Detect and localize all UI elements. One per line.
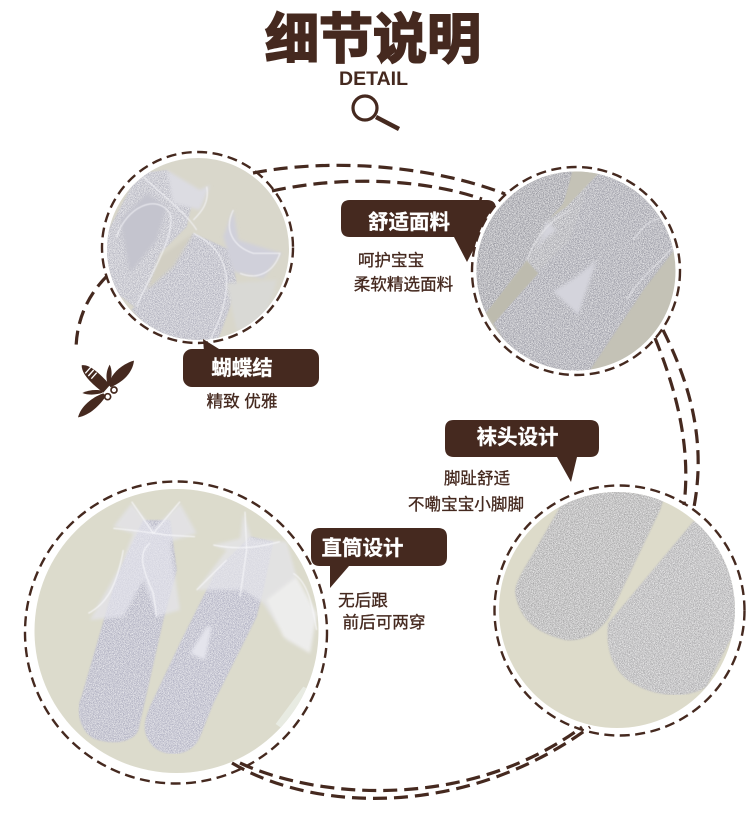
text: 不嘞宝宝小脚脚: 不嘞宝宝小脚脚: [408, 495, 524, 514]
text: 精致 优雅: 精致 优雅: [206, 392, 278, 411]
dashed ring: [494, 486, 744, 736]
label: 直筒设计: 直筒设计: [322, 537, 404, 560]
title: 细节说明: [265, 10, 481, 70]
connector: right double dashed arc: [655, 330, 698, 512]
label: 袜头设计: 袜头设计: [476, 426, 558, 449]
panel: full socks photo: [25, 480, 327, 784]
text: 脚趾舒适: 脚趾舒适: [444, 469, 510, 488]
label: 舒适面料: [341, 200, 496, 262]
label: 舒适面料: 舒适面料: [368, 210, 450, 234]
icon: dragonfly: [78, 361, 134, 417]
dashed ring: [25, 482, 327, 784]
connector: bottom double dashed arc: [232, 727, 590, 798]
connector: top double dashed arc: [253, 165, 505, 199]
connector: left dashed arc: [76, 276, 107, 351]
label: 袜头设计: [445, 420, 599, 482]
label: 直筒设计: [311, 528, 447, 588]
photo: sock toes: [495, 488, 740, 733]
label: 蝴蝶结: 蝴蝶结: [211, 357, 273, 380]
icon: magnifying glass: [353, 96, 399, 129]
label: 蝴蝶结: [183, 349, 319, 387]
dashed ring: [472, 167, 680, 375]
label pointer: [203, 339, 219, 352]
photo: fabric close-up: [476, 172, 676, 370]
panel: bow photo: [100, 150, 300, 352]
photo: pair of socks: [30, 480, 325, 780]
text: 无后跟: 无后跟: [338, 591, 388, 610]
text: 柔软精选面料: 柔软精选面料: [354, 275, 454, 294]
text: 前后可两穿: 前后可两穿: [343, 613, 425, 632]
photo: bow close-up: [107, 158, 289, 340]
text: 呵护宝宝: 呵护宝宝: [358, 251, 424, 270]
subtitle: DETAIL: DETAIL: [339, 68, 408, 90]
dashed ring: [102, 152, 293, 343]
panel: fabric photo: [470, 165, 685, 380]
panel: toe photo: [494, 486, 744, 736]
